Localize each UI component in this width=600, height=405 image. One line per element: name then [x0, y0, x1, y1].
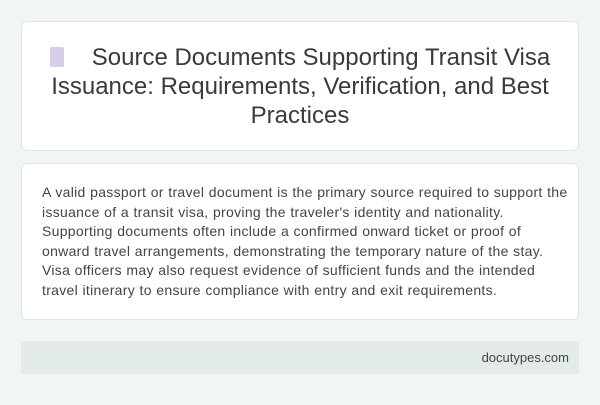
text block: issuance of a transit visa, proving the traveler's identity and nationality. — [42, 204, 504, 220]
text block — [42, 184, 567, 298]
text block: Supporting documents often include a confirmed onward ticket or proof of — [42, 223, 521, 239]
title: Source Documents Supporting Transit Visa Issuance: Requirements, Verification, and Best Practices — [51, 44, 550, 129]
text block: travel itinerary to ensure compliance with entry and exit requirements. — [42, 282, 497, 298]
panel: body text — [21, 163, 579, 320]
panel: title — [21, 21, 579, 151]
footer text: docutypes.com — [482, 350, 569, 365]
text block: Visa officers may also request evidence of sufficient funds and the intended — [42, 262, 535, 278]
text block: A valid passport or travel document is the primary source required to support the — [42, 184, 567, 200]
footer — [21, 341, 579, 374]
text block: onward travel arrangements, demonstrating the temporary nature of the stay. — [42, 242, 543, 258]
